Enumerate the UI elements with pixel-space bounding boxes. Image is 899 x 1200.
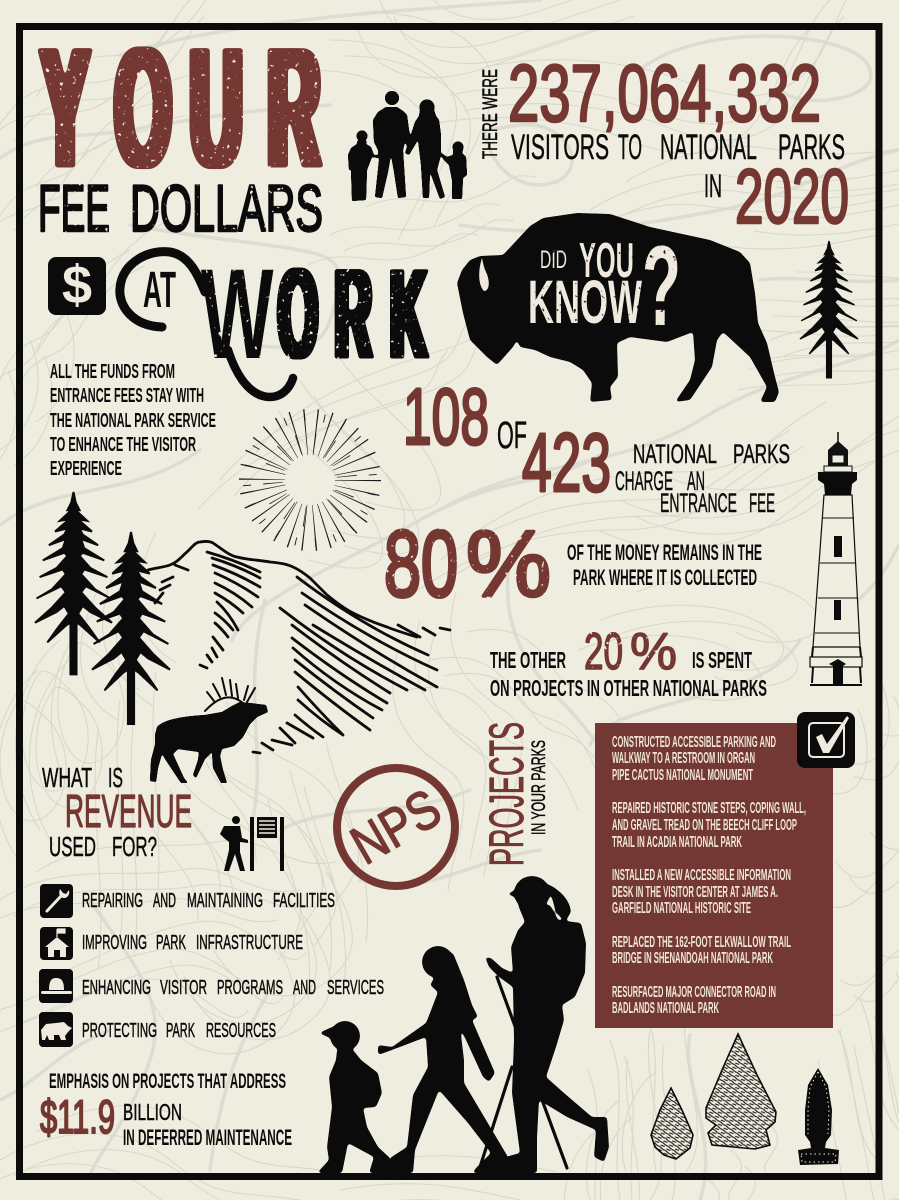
arrowhead black: [798, 1068, 839, 1165]
icon: checkbox: [797, 712, 855, 768]
label: national parks charge an entrance fee: ENTRANCE: [660, 488, 737, 518]
icon: pine tree right: [800, 241, 858, 378]
heading: what is revenue used for: REVENUE: [65, 785, 192, 837]
arrowhead large: [706, 1034, 776, 1149]
illustration: pine trees: [35, 492, 170, 724]
icon: hiker at trail sign: [220, 816, 284, 871]
item: visitor programs: PROGRAMS: [217, 976, 283, 999]
heading: what is revenue used for: FOR?: [112, 831, 157, 862]
item: visitor programs: AND: [293, 976, 316, 999]
label: there were: THERE WERE: [479, 69, 502, 159]
number: 80%: [384, 511, 551, 616]
text block: funds stay with NPS: EXPERIENCE: [50, 458, 122, 480]
label: visitors to national parks: NATIONAL: [660, 128, 757, 167]
project: trail bridge: [612, 934, 791, 967]
label: visitors to national parks: [511, 128, 845, 167]
title line: FEE DOLLARS: FEE: [38, 171, 110, 245]
text: money remains in the park: [567, 540, 762, 590]
icon: dollar sign: [48, 255, 106, 315]
item: repairing facilities: REPAIRING: [82, 889, 143, 912]
number: 423: 423: [522, 416, 611, 509]
project: parking and walkway: [612, 734, 776, 784]
label: national parks charge an entrance fee: PARKS: [733, 439, 790, 469]
stat: 80 percent: [384, 511, 762, 616]
project: stone steps: [612, 800, 806, 851]
heading: what is revenue used for: WHAT: [42, 762, 92, 793]
stat: deferred maintenance: BILLION: [123, 1099, 182, 1125]
icon: dollar sign: $: [62, 255, 92, 315]
label: of: OF: [497, 415, 527, 457]
icon: lighthouse: [810, 432, 862, 685]
title line: FEE DOLLARS: [38, 171, 323, 245]
label: visitors to national parks: VISITORS: [511, 128, 609, 167]
icon: bison with did you know: [457, 213, 779, 402]
item: park resources: RESOURCES: [206, 1019, 276, 1042]
item: repairing facilities: [40, 884, 335, 918]
text block: funds stay with NPS: ALL THE FUNDS FROM: [50, 361, 175, 383]
icon: sunburst: [247, 417, 373, 543]
project: information desk: [612, 867, 791, 917]
title word: YOUR: YOUR: [41, 12, 320, 204]
stat: other 20 percent: [490, 623, 767, 701]
text: did you know: KNOW: [528, 268, 642, 336]
title line: FEE DOLLARS: DOLLARS: [130, 171, 323, 245]
hiker: girl: [378, 946, 510, 1173]
number: $11.9: $11.9: [40, 1090, 115, 1143]
number: 108: 108: [403, 372, 489, 461]
project: parking and walkway: WALKWAY TO A RESTROOM IN ORGAN: [612, 750, 755, 767]
panel: projects list: [595, 723, 833, 1028]
label: national parks charge an entrance fee: [615, 439, 790, 518]
illustration: elk: [150, 678, 268, 783]
item: park resources: [39, 1012, 276, 1047]
heading: projects in your parks: IN YOUR PARKS: [529, 740, 550, 835]
project: connector road: BADLANDS NATIONAL PARK: [612, 1000, 719, 1017]
number: 80%: %: [466, 511, 551, 616]
number: 20%: 20: [584, 623, 623, 681]
illustration: arrowheads: [651, 1034, 839, 1165]
stat: deferred maintenance: [40, 1070, 292, 1150]
item: park resources: PARK: [166, 1019, 195, 1042]
project: connector road: [612, 984, 776, 1017]
label: national parks charge an entrance fee: CHARGE: [615, 466, 673, 496]
stat: deferred maintenance: IN DEFERRED MAINTENANCE: [123, 1125, 292, 1150]
item: park infrastructure: IMPROVING: [82, 931, 147, 954]
text: did you know: DID: [540, 246, 567, 274]
item: park resources: PROTECTING: [82, 1019, 157, 1042]
project: parking and walkway: PIPE CACTUS NATIONAL MONUMENT: [612, 767, 753, 784]
item: repairing facilities: MAINTAINING: [187, 889, 263, 912]
stat: 108 of 423 parks: [403, 372, 790, 518]
text: did you know: YOU: [579, 234, 634, 288]
stat: visitors in 2020: [479, 49, 849, 240]
label: visitors to national parks: TO: [618, 128, 642, 167]
item: visitor programs: SERVICES: [327, 976, 384, 999]
number: 20%: %: [630, 623, 677, 681]
label: national parks charge an entrance fee: FEE: [749, 488, 775, 518]
item: park infrastructure: [40, 927, 303, 960]
item: visitor programs: VISITOR: [160, 976, 207, 999]
number: 80%: 80: [384, 511, 458, 616]
stat: other 20 percent: IS SPENT: [692, 647, 752, 673]
heading: what is revenue used for: IS: [108, 762, 123, 793]
list: revenue uses: [39, 884, 384, 1047]
stat: other 20 percent: THE OTHER: [490, 647, 566, 673]
hiker: boy: [317, 1021, 397, 1173]
text block: funds stay with NPS: ENTRANCE FEES STAY WITH: [50, 385, 204, 407]
item: visitor programs: [39, 969, 384, 1003]
title word: WORK with tail: ORK: [278, 242, 427, 386]
title word: AT inside hook: [120, 252, 205, 327]
badge: NPS: NPS: [341, 778, 451, 876]
item: visitor programs: ENHANCING: [82, 976, 151, 999]
project: stone steps: TRAIL IN ACADIA NATIONAL PARK: [612, 834, 742, 851]
heading: what is revenue used for: [42, 762, 192, 862]
label: national parks charge an entrance fee: NATIONAL: [633, 439, 717, 469]
title: your fee dollars at work: [38, 12, 427, 397]
icon: family silhouette: [348, 91, 467, 201]
title word: AT inside hook: AT: [143, 261, 176, 318]
text: did you know: [528, 223, 681, 350]
text block: funds stay with NPS: TO ENHANCE THE VISITOR: [50, 434, 196, 456]
heading: what is revenue used for: USED: [49, 831, 96, 862]
illustration: hiking family: [317, 876, 609, 1173]
item: park infrastructure: INFRASTRUCTURE: [196, 931, 303, 954]
item: repairing facilities: FACILITIES: [273, 889, 335, 912]
illustration: hatched mountain: [148, 541, 450, 753]
stat: deferred maintenance: EMPHASIS ON PROJECTS THAT ADDRESS: [49, 1070, 286, 1093]
label: national parks charge an entrance fee: AN: [687, 466, 705, 496]
number: 20%: [584, 623, 677, 681]
arrowhead small: [651, 1088, 693, 1159]
heading: projects in your parks: PROJECTS: [481, 722, 534, 866]
item: repairing facilities: AND: [153, 889, 176, 912]
project: information desk: GARFIELD NATIONAL HISTORIC SITE: [612, 900, 751, 917]
heading: projects in your parks: [481, 722, 550, 866]
label: in: IN: [704, 168, 722, 204]
text block: funds stay with NPS: [50, 361, 216, 480]
text block: funds stay with NPS: THE NATIONAL PARK SERVICE: [50, 410, 216, 432]
item: park infrastructure: PARK: [156, 931, 186, 954]
label: visitors to national parks: PARKS: [778, 128, 845, 167]
title word: WORK with tail: W: [201, 243, 274, 386]
title word: WORK with tail: [201, 242, 427, 397]
text: did you know: ?: [642, 223, 681, 350]
hiker: adult with poles: [472, 876, 609, 1173]
